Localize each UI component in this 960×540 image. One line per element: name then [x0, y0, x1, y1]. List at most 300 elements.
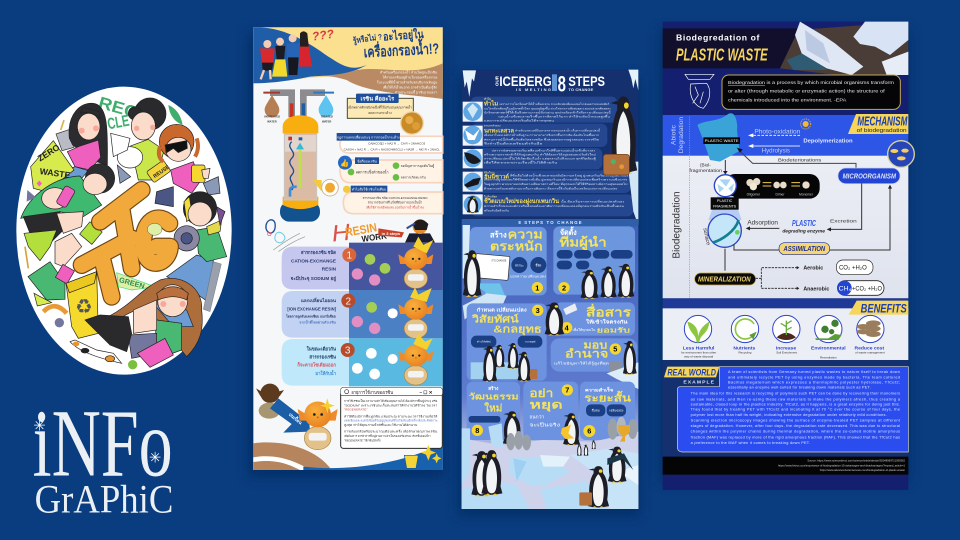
step 2 background — [282, 290, 443, 338]
vertical dashed divider — [688, 117, 690, 298]
penguins of leadership team — [581, 264, 634, 299]
card: communicate: ให้เข้าใจตรงกัน — [586, 318, 629, 324]
benefit: reduce cost — [855, 315, 885, 355]
row 4 penguin swimming: เพื่อการอยู่รอดและใช้ชีวิตอย่างยั่งยืน ฝูงเพนกวินเองมีการเปลี่ยนแปลงเพื่อสร้างความแข็งแกร่ง — [484, 177, 628, 182]
microorganism badge — [888, 141, 914, 167]
abiotic degradation label: Abiotic — [671, 124, 678, 145]
penguin on ice — [607, 341, 638, 389]
abiotic degradation label — [671, 117, 685, 153]
step 1 ions — [352, 254, 390, 286]
curly hair boy in lime shirt — [111, 98, 171, 183]
title: Biodegredation of — [676, 33, 759, 43]
panel 3 shadow — [660, 30, 910, 482]
panel lower gradient — [462, 225, 638, 508]
title: TO CHANGE — [568, 87, 594, 92]
sparkle in letter o: ✳ — [149, 450, 161, 467]
row 4 penguin swimming: ฮันนี่ซาวด์ — [484, 172, 509, 180]
step 2 text: แลกเปลี่ยนไอออน — [301, 297, 336, 303]
resin life window: − ☐ ✕ — [419, 390, 433, 395]
mineralization pill — [695, 273, 756, 285]
info graphic wordmark — [33, 389, 173, 522]
water and waste icon — [685, 74, 714, 108]
plastic waste bag: PLASTIC WASTE — [705, 139, 739, 143]
aerobic anaerobic branches — [756, 268, 797, 288]
curly hair boy in lime shirt: REUSE — [152, 164, 171, 180]
real world text: and ultimately recycle PET by using enzymes made by bacteria. The team cultured — [728, 375, 900, 379]
benefit: nutrients — [731, 315, 759, 355]
bio-fragmentation label: (Biol- — [700, 163, 711, 168]
title — [352, 27, 439, 61]
card: create urgency: บอกความเปลี่ยนแปลง — [510, 275, 547, 279]
real world text: fraction (MAF) was replaced by more of the rigid amorphous fraction (RAF). This showed that the TfCut2 has — [691, 435, 900, 439]
card: new culture: ใหม่ — [484, 401, 502, 414]
triangle rulers and small props — [25, 190, 64, 327]
card: empower: แก้ไขปัญหาให้ได้รู้สูงที่สุด — [554, 360, 609, 366]
real world text: essentially an enzyme well-suited for breaking down materials such as PET. — [728, 385, 871, 389]
benefit: soil enrichment — [773, 315, 800, 355]
step 1 background — [282, 243, 443, 290]
definition box: or alter (through metabolic or enzymatic action) the structure of — [728, 89, 886, 94]
excretion arrow — [827, 183, 862, 231]
row 1 why: และการเปลี่ยนแปลงเริ่มต้นได้จากทุกคน — [484, 118, 554, 123]
card: create urgency: ตระหนัก — [490, 239, 543, 253]
penguin with trophy wing: 6 — [587, 427, 591, 436]
card: short term wins: ความสำเร็จ — [585, 386, 614, 393]
sources footer: https://www.advancedsciencenews.com/biodegradation-of-plastic-waste/ — [820, 468, 905, 472]
adsorption arrow — [746, 221, 779, 230]
ice blocks — [462, 423, 638, 509]
card: vision and strategy: วิสัยทัศน์ — [472, 314, 519, 326]
ball of yarn — [128, 360, 137, 369]
sun icon — [801, 119, 811, 129]
header paragraph: ในระบบที่มีน้ำผ่านสำหรับลดปริมาณหินปูน — [377, 79, 438, 84]
mascot 1 — [398, 248, 433, 288]
row 1 why — [463, 97, 617, 123]
card: create urgency: IT'S CHANGE — [492, 260, 507, 263]
resin life window: "SODIUM" เพราะเรซินจะเก็บสะสมทำให้ทำงานได้ช้าลง ในเวลา — [344, 401, 438, 407]
step 1 text: จะมีประจุ SODIUM อยู่ — [291, 275, 336, 282]
abiotic band — [663, 115, 908, 156]
penguin group with chicks — [503, 411, 531, 450]
biodegradation label: Biodegradation — [672, 191, 683, 259]
girl with long brown hair — [85, 278, 202, 367]
benefit: environmental remediation: Environmental — [811, 345, 846, 351]
card: leadership team: จัดตั้ง — [560, 226, 577, 237]
step 2 text: โดยการดูดจับแคลเซียม แมกนีเซียม — [285, 314, 336, 320]
how resin work heading: in 3 steps — [382, 231, 401, 236]
card: communicate — [555, 302, 635, 336]
card: vision and strategy: วางกลยุทธ์ — [525, 340, 536, 345]
card: empower: อำนาจ — [565, 347, 608, 361]
formula block: CA[HCO3]2 + NA2 R → CA R + 2NAHCO3 — [368, 142, 426, 146]
why sodium block: สารกรองเรซิน ชนิด CATION-EXCHANGE RESIN — [363, 196, 427, 200]
resin life window: การใช้เรซินเป็นเวลานานทำให้เสื่อมคุณภาพได้ ต้องมีการฟื้นฟูประจุ หรือ — [344, 397, 438, 404]
card: create urgency: ความ — [508, 227, 543, 241]
bottom waves — [253, 442, 443, 470]
benefit: nutrients: Nutrients — [733, 345, 755, 351]
plastic waste bag — [697, 113, 740, 162]
benefits block: 👍 — [340, 158, 350, 167]
penguin with trophy wing — [561, 413, 596, 456]
mineralization pill: MINERALIZATION — [698, 275, 751, 284]
benefit: less harmful: Less Harmful — [683, 345, 715, 351]
adult penguin pair — [471, 450, 502, 496]
number badges 1 and 2: 1 — [535, 283, 539, 292]
card: leadership team — [553, 226, 635, 295]
card: new culture — [467, 382, 520, 440]
what is resin box: ลดความกระด้าง — [368, 111, 392, 115]
bio-fragmentation label — [689, 160, 728, 175]
aerobic outcome — [797, 260, 873, 275]
anaerobic outcome: CH₄ — [839, 286, 852, 292]
benefits block: ลดการเกิดตะกรัน — [401, 176, 427, 180]
sunglasses girl with braids — [155, 124, 220, 207]
step 3 text: มาให้กับน้ำ — [315, 369, 336, 376]
card: create urgency: สถานะ — [515, 263, 524, 267]
penguin with telescope — [545, 303, 577, 335]
crowns — [410, 237, 433, 350]
step 2 text: [ION EXCHANGE RESIN] — [287, 306, 337, 311]
real world text: changes within the polymer chains during thermal degradation, where the so-called mobile amorphous — [691, 430, 900, 434]
benefit: less harmful — [681, 315, 716, 358]
saturated brown mascot with basket — [256, 384, 284, 419]
photo-oxidation arrow — [748, 128, 801, 137]
header paragraph: ไส้กรองเรซินอยู่ด้านในของเครื่องกรอง — [381, 74, 438, 79]
drink cup — [56, 120, 74, 151]
title: PLASTIC WASTE — [676, 45, 768, 65]
treated water drop — [319, 95, 333, 124]
boy in green shirt lying — [21, 164, 115, 300]
why sodium block: เพื่อใช้สารเคมีทดแทน ยอดในการน้ำขึ้นน้ำลง — [366, 205, 424, 210]
step 1 text: สารกรองเรซิน ชนิด — [301, 249, 336, 255]
fresh mascot with sodium basket — [298, 402, 338, 450]
row 5 new penguin life: ชีวิตแบบใหม่ของฝูงนกเพนกวิน — [484, 197, 560, 206]
resin sample circle — [401, 112, 423, 134]
anaerobic outcome: +CO₂ +H₂O — [852, 286, 882, 292]
row 1 why: เพราะภาวะโลกร้อนทำให้น้ำแข็งละลาย ระบบนิเวศเปลี่ยนแปลงไป ส่งผลกระทบต่อสัตว์ — [499, 101, 610, 106]
resin life window: สูงสุด ทำให้คุณภาพน้ำดีขึ้นและใช้งานได้อีกนาน — [344, 422, 417, 428]
card: new culture: 8 — [475, 426, 479, 435]
untreated water drop: UNTREATED — [264, 115, 280, 119]
headphones — [43, 306, 67, 313]
definition box — [722, 75, 900, 109]
definition box: Biodegradation is a process by which microbial organisms transform — [728, 80, 894, 85]
row 2 seabird: สำหรับนกทะเลที่บินหาอาหารตามแหล่งน้ำ เห็นการเปลี่ยนแปลงนี้ — [515, 128, 601, 133]
sources footer — [663, 457, 908, 475]
anaerobic outcome — [797, 281, 884, 295]
title: 8 — [558, 72, 566, 97]
row 3 whale: สร้างความหวาดกลัวให้กับฝูงเพนกวิน ทำให้ต้องหาวิธีอยู่รอดและปรับตัวใหม่ — [484, 153, 596, 157]
real world banner: REAL WORLD — [667, 367, 716, 377]
penguins at vision card — [483, 343, 537, 382]
benefit: soil enrichment: Increase — [776, 345, 796, 351]
standing penguin with suitcase — [579, 466, 609, 508]
card: empower — [551, 338, 637, 374]
panel background — [253, 27, 443, 470]
header black block — [663, 28, 804, 68]
panel 1 shadow — [248, 33, 444, 477]
regenerate arrow: ปนเปื้อน — [288, 410, 304, 425]
row 2 seabird: ตามหาคำตอบ — [484, 124, 501, 128]
card: create urgency — [470, 227, 547, 295]
step 2 ions — [352, 302, 398, 334]
card: vision and strategy: สร้างวิสัยทัศน์ — [477, 340, 491, 344]
resin life window — [341, 388, 442, 448]
benefit: soil enrichment: Soil Enrichment — [776, 351, 797, 355]
real world text — [691, 370, 901, 445]
card: empower: 5 — [613, 345, 617, 354]
title: OUR — [494, 75, 499, 86]
aerobic outcome: CO₂ +H₂O — [839, 266, 867, 272]
assimilation arrow and pill: ASSIMILATION — [783, 246, 826, 253]
title: ICEBERG — [499, 73, 552, 89]
step number badges — [341, 248, 356, 357]
panel: penguin iceberg 8 steps — [462, 69, 638, 509]
pipes — [263, 93, 334, 117]
card: do not stop: จะเป็นจริง — [529, 421, 560, 428]
title — [676, 33, 768, 65]
what is resin box: เม็ดพลาสติกชนิดหนึ่งที่ใช้ปรับปรุงคุณภาพน้ำ — [348, 104, 412, 111]
row 4 penguin swimming: ด้วยความหวังและพลังงานบวกในการเดินทาง เรื่องราวนี้จึงเริ่มต้นเป็นบทเรียนแห่งการเปลี่ยนแปลง — [484, 185, 618, 190]
letters TTG — [82, 190, 170, 297]
question marks: ??? — [311, 27, 336, 44]
panel navy background — [663, 22, 908, 490]
sources footer: Source: https://www.sciencedirect.com/science/article/abs/pii/S0048969721059362 — [807, 459, 906, 463]
title: อะไรอยู่ใน — [383, 27, 424, 45]
mechanism banner — [848, 114, 908, 134]
card: do not stop: หยุด — [529, 399, 563, 412]
plastic degrading enzyme: degrading enzyme — [782, 229, 826, 234]
title: เครื่องกรองน้ำ!? — [363, 37, 439, 61]
title: IS MELTING — [516, 87, 551, 92]
row 1 why: ทำไม — [484, 97, 491, 101]
row 5 new penguin life: พร้อมรับมือด้วยกัน — [484, 208, 509, 212]
what is resin box — [347, 94, 413, 118]
penguin diving pose — [607, 447, 633, 483]
recycle lettering: CLE — [106, 113, 131, 133]
step number badges: 2 — [346, 296, 352, 307]
header paragraph: สำหรับเครื่องกรองน้ำ ส่วนใหญ่จะมีเรซิน — [380, 69, 438, 74]
step 1 text: CATION-EXCHANGE — [291, 258, 336, 263]
row 1 why: แผ่นน้ำแข็งละลายเร็วขึ้นกว่าที่คาดไว้มาก ทำให้ระดับน้ำทะเลสูงขึ้น — [498, 114, 610, 119]
benefit: environmental remediation — [811, 315, 846, 360]
benefits banner — [849, 301, 908, 315]
card: vision and strategy: &กลยุทธ — [493, 325, 542, 336]
card: short term wins — [580, 382, 635, 440]
star sparkle — [320, 398, 335, 413]
ice ledge under card 1 — [463, 293, 507, 320]
row 1 why: นักวิทยาศาสตร์ชี้ให้เห็นถึงสถานการณ์ที่เร่งด่วน ทุกฝ่ายต้องเข้าใจถึงการเปลี่ยนแปลงนี้ — [484, 110, 612, 116]
salt bottle and sparkles — [404, 445, 441, 468]
plastic degrading enzyme: PLASTIC — [792, 219, 816, 228]
why sodium block: ทำไมถึงใช้เรซินโซเดียม — [352, 187, 386, 192]
step 2 text — [285, 297, 337, 324]
step 3 text: สารกรองเรซิน — [309, 354, 337, 360]
card: do not stop: อย่า — [529, 387, 553, 400]
card: new culture: สร้าง — [488, 385, 499, 391]
row 2 seabird — [463, 124, 607, 147]
card: short term wins: ชื่นชม — [592, 408, 600, 413]
left ice pillar — [463, 225, 470, 278]
how resin work heading: H — [330, 219, 352, 247]
aerobic outcome: Aerobic — [803, 266, 823, 272]
mascot 2 — [398, 298, 433, 338]
card: communicate: สื่อสาร — [586, 304, 632, 320]
row 5 new penguin life: ในท้ายที่สุด — [484, 194, 497, 199]
row 4 penguin swimming — [463, 170, 631, 193]
surface circle: surface — [701, 227, 711, 246]
row 3 whale: เพื่อให้พวกเขาผ่านเรื่องนี้ไปได้ด้วยกัน — [484, 161, 558, 165]
word iNFo: iNFo — [33, 389, 173, 496]
lower half arrow to mineralization — [723, 249, 726, 271]
step 3 text: ก็จะคายโซเดียมออก — [297, 361, 336, 368]
step 1 text — [291, 249, 337, 282]
yellow recycling bin — [66, 272, 98, 338]
real world text: Bacillus megaterium which expresses a thermophilic polyester hydrolase, TfCut2; — [728, 380, 900, 384]
real world text: as raw materials, and then re-using these raw materials to make the polymers afresh, thus creating a — [691, 397, 901, 401]
ruler — [203, 262, 221, 312]
real world text: A team of scientists from Germany turned plastic wastes to nature itself to break down — [728, 370, 900, 374]
hydrolysis arrow — [748, 144, 800, 155]
hydrolysis arrow: Hydrolysis — [762, 149, 790, 155]
girl with black hair and pink shirt — [63, 103, 108, 180]
real world text: The main idea for this research is recycling of polymers such PET can be done by recovering their monomers — [691, 392, 900, 396]
benefits block: ข้อดีของเรซิน — [357, 158, 378, 163]
surface circle — [701, 214, 741, 247]
benefits banner: BENEFITS — [861, 301, 907, 315]
step 3 text — [297, 345, 337, 376]
how resin work heading — [330, 219, 404, 247]
step 3 text: ในขณะเดียวกัน — [307, 345, 337, 351]
step 3 ions — [352, 348, 398, 379]
panel top background — [462, 69, 638, 226]
header photo of plastic — [780, 22, 908, 75]
number badges 1 and 2 — [532, 282, 570, 293]
card: new culture: วัฒนธรรม — [469, 392, 519, 402]
recycle lettering: RECYC — [96, 93, 166, 130]
number badges 1 and 2: 2 — [562, 283, 566, 292]
resin life window: แคลเซียมและแมกนีเซียมที่จับอยู่ถูกแทนที่ด้วยโซเดียมอีกครั้ง เพื่อประสิทธิภาพ — [344, 418, 437, 423]
benefits block — [338, 156, 443, 183]
resin life window: "REGENERATE" — [344, 408, 367, 412]
step panels — [282, 237, 443, 386]
real world banner: EXAMPLE — [683, 379, 715, 385]
header paragraph: ส่วนประกอบนี้ (เรซิน) ของเรา — [395, 89, 437, 94]
row 5 new penguin life: ความสำเร็จขององค์กรหรือสังคมต้องอาศัยการเปลี่ยนแปลงที่ทุกคนร่วมมือกันเป็นขั้นตอน — [484, 203, 624, 209]
green leaf mark — [168, 105, 183, 125]
real world banner — [664, 367, 719, 385]
header paragraph — [377, 69, 438, 94]
formula block — [337, 133, 443, 153]
panel 2 shadow — [458, 76, 640, 516]
row 5 new penguin life: นั้น ต้องเริ่มจากการเปลี่ยนแปลงตัวเอง — [561, 200, 625, 204]
how resin work heading: RESIN — [344, 220, 378, 240]
abiotic degradation label: Degradation — [678, 117, 685, 153]
large penguin with suitcase — [603, 96, 638, 225]
benefit: reduce cost: of waste management — [855, 351, 885, 355]
benefit: reduce cost: Reduce cost — [855, 345, 884, 351]
step number badges: 1 — [347, 251, 353, 262]
card: vision and strategy: กำหนด เปลี่ยนแปลง — [477, 307, 528, 313]
green leaf tag: GREEN — [118, 275, 146, 291]
assimilation arrow and pill — [734, 185, 892, 255]
row 4 penguin swimming: ชีวิตใหม่ — [484, 171, 494, 175]
chicks with trophy — [608, 417, 637, 442]
untreated water drop — [264, 95, 280, 124]
adsorption arrow: Adsorption — [747, 221, 778, 227]
plastic fragments circle — [708, 175, 742, 220]
treated water drop: WATER — [322, 120, 331, 124]
title: รู้หรือไม่ ? — [352, 31, 383, 46]
real world text: They found that by treating PET with TfCut2 and incubating it at 70 °C over the course of four days, the — [691, 408, 900, 412]
real world section background — [663, 360, 908, 457]
icicles — [463, 70, 638, 97]
row 4 penguin swimming: ที่ซึ่งเต็มไปด้วยน้ำแข็งละลายแต่ยังมีความหวังอยู่ ฝูงเพนกวินเริ่มเรียนรู้และรับมือ — [510, 172, 629, 177]
oligomer dimer monomer pill: Oligomer — [747, 193, 761, 197]
biodeteriorations arrow — [737, 148, 856, 170]
card: communicate: ยอมรับ — [597, 326, 630, 334]
resin beads magnifier — [313, 179, 338, 196]
benefit: less harmful: way of waste disposal — [684, 354, 714, 358]
calico cat — [70, 340, 122, 363]
oligomer dimer monomer pill: Monomer — [799, 193, 814, 197]
penguin with megaphone and iceberg, left — [463, 250, 506, 298]
step number badges: 3 — [345, 346, 351, 357]
card: create urgency: ชี้ชัด — [535, 262, 541, 267]
penguin icon in row 5 — [467, 196, 479, 213]
resin life window: อายุการใช้งานของเรซิน — [351, 389, 394, 396]
plastic fragments circle: FRAGMENTS — [713, 204, 737, 208]
header paragraph: เพื่อให้ได้น้ำสะอาด อาจจำเป็นต้องรู้จัก — [383, 83, 437, 89]
microorganism pill — [838, 168, 900, 184]
row 4 penguin swimming: ในฝูงทุกตัว พวกเขาออกเดินทางเพื่อหาสถานที่ใหม่ ที่ทุกคนจะได้ใช้ชีวิตอย่างมีความสุขตลอดไป — [484, 182, 628, 187]
why sodium block: สามารถจับสารที่ไม่ใช่ที่ต้องการออกเป็นน้ำ — [368, 199, 423, 205]
biodegradation background — [663, 156, 908, 298]
mechanism banner: MECHANISM — [857, 114, 908, 128]
card: vision and strategy: 3 — [536, 306, 540, 315]
benefit: nutrients: Recycling — [739, 351, 752, 355]
row 2 seabird: จึงจำเป็นต้องเตรียมตัวรับมือ — [483, 141, 543, 146]
formula block: CASO4 + NA2 R → CA R + NA2SO4MGCL2 + NA2R → MG R + 2NACL — [344, 148, 440, 152]
step 1 text: RESIN — [322, 267, 337, 272]
8 steps to change heading — [462, 219, 638, 226]
panel: resin water filter infographic — [253, 27, 443, 470]
mechanism banner: of biodegradation — [857, 128, 907, 134]
card: do not stop: 7 — [565, 386, 569, 395]
yellow recycling bin: ♻ — [77, 299, 92, 316]
woman looking icon — [405, 219, 435, 243]
card: leadership team: ทีมผู้นำ — [559, 236, 607, 251]
green leaf tag — [117, 223, 162, 291]
decorative blue blob doodle — [266, 220, 305, 252]
card: short term wins: ระยะสั้น — [584, 391, 631, 405]
plastic degrading enzyme — [782, 219, 826, 234]
sources footer: https://www.fetecs.com/importance-of-biodegradation-15-advantages-and-disadvantages/?expand_article=1 — [778, 463, 906, 467]
benefits white panel — [663, 308, 908, 360]
excretion arrow: Excretion — [830, 219, 857, 225]
row 1 why: ทำไม — [484, 100, 498, 108]
filter cylinder — [280, 115, 320, 222]
anaerobic outcome: Anaerobic — [803, 286, 829, 292]
row 3 whale: ปลาวาฬเพชฌฆาตเริ่มเคลื่อนเข้ามาใกล้ขึ้นตามแผ่นน้ำแข็งที่บางลง — [492, 148, 596, 153]
formula block: กฎการแลกเปลี่ยนประจุ การกรองน้ำกระด้าง — [337, 134, 400, 140]
regenerate arrow — [270, 398, 310, 433]
card: communicate: 4 — [565, 323, 570, 332]
row 2 seabird: นกทะเลสวล — [484, 127, 514, 134]
oligomer dimer monomer pill: Dimer — [776, 193, 785, 197]
benefit: less harmful: for environment than other — [681, 351, 716, 355]
card: short term wins: เฉลิมฉลอง — [609, 409, 624, 413]
